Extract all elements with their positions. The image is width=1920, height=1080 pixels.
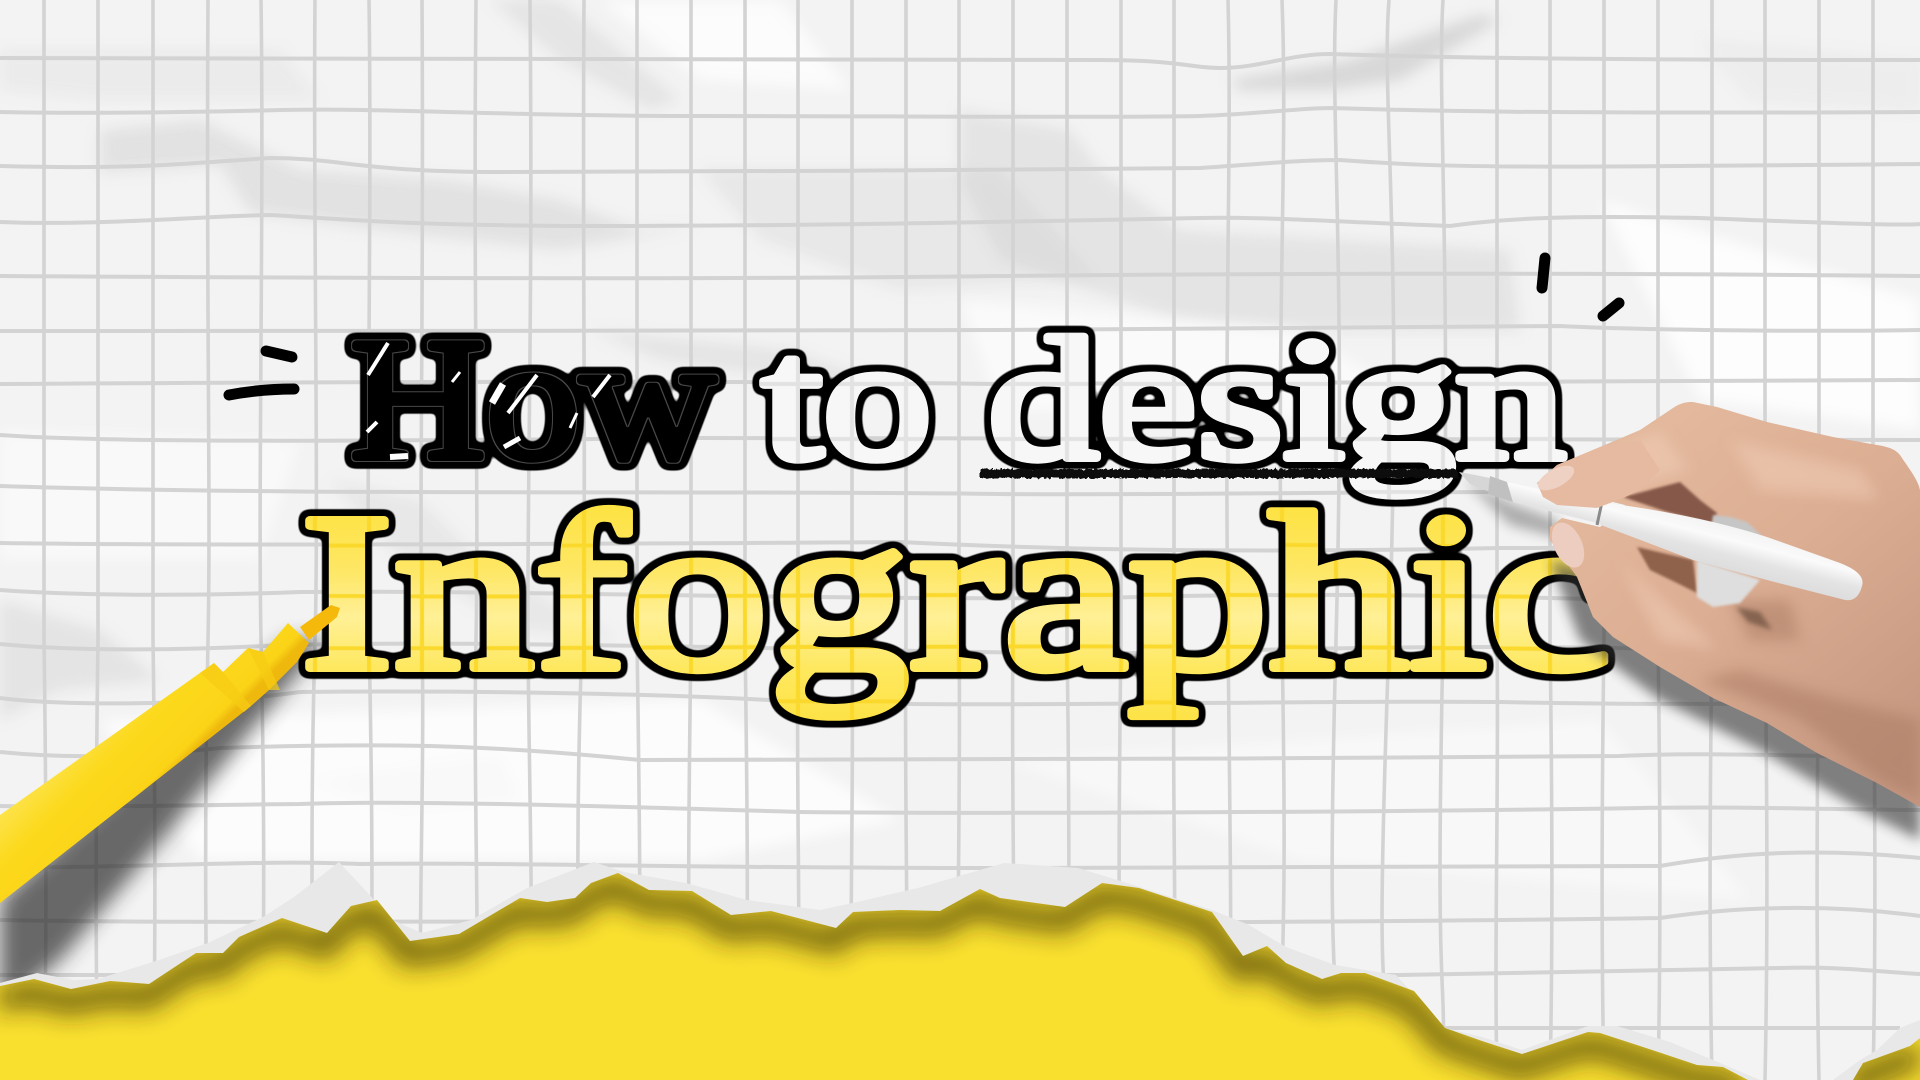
scribble marks right [1542, 258, 1619, 316]
word: design: design [988, 302, 1566, 496]
title word: How: How [350, 302, 716, 496]
index fingernail [1534, 461, 1578, 495]
pen body [1507, 482, 1863, 600]
word: to: to [762, 302, 932, 496]
hand shadow [1550, 560, 1920, 840]
thumb nail [1545, 517, 1591, 573]
marker collar shading [200, 648, 280, 712]
pen ring [1597, 502, 1602, 525]
marker nib [300, 605, 340, 640]
torn paper edge [0, 862, 1920, 1080]
pen tip [1459, 472, 1490, 492]
index finger [1537, 440, 1660, 508]
pencil underline under design [980, 469, 1458, 478]
hand [1537, 402, 1920, 807]
title words: to design [762, 302, 1566, 496]
icon: yellow marker [0, 605, 340, 903]
marker shadow [0, 640, 325, 1010]
title line: Infographic: Infographic [300, 467, 1612, 717]
paper gap above pen [1712, 515, 1763, 537]
pen tip shadow [1462, 478, 1560, 538]
glossy streaks on How [367, 343, 610, 457]
marker body and collar [0, 623, 309, 903]
hand shading [1636, 436, 1920, 794]
dark finger below pen [1637, 547, 1697, 593]
yellow torn paper panel [0, 860, 1920, 1080]
dark finger above pen [1623, 482, 1717, 524]
pen collar [1488, 476, 1513, 502]
paper gap below pen [1697, 560, 1760, 607]
icon: hand holding pen [1459, 402, 1920, 807]
scribble marks left [229, 351, 294, 395]
